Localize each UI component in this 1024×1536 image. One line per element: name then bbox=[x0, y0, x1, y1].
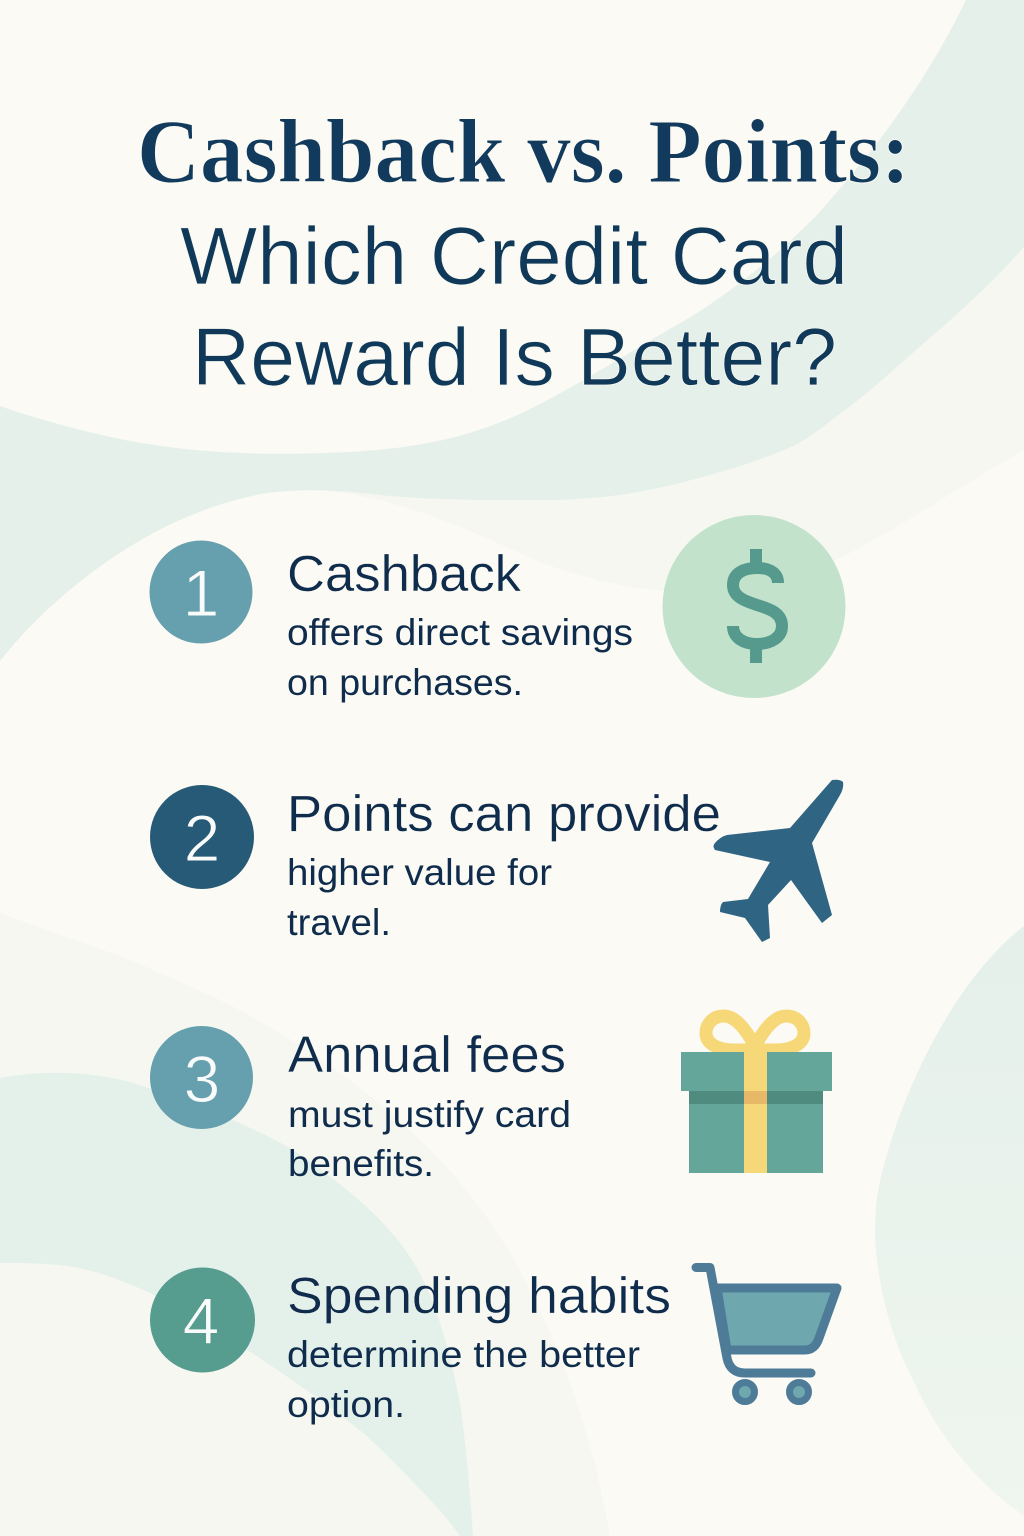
text: cashback: offers direct savings bbox=[287, 612, 633, 653]
number badge 3: 3 bbox=[184, 1042, 220, 1116]
number badge 4: 4 bbox=[183, 1284, 219, 1358]
text: cashback: Cashback bbox=[287, 545, 522, 602]
text: spending habits: determine the better bbox=[287, 1334, 640, 1375]
icon: gift box bbox=[681, 1016, 832, 1173]
text: points: higher value for bbox=[287, 852, 552, 893]
number badge 3 bbox=[150, 1026, 253, 1129]
number badge 4 bbox=[150, 1268, 255, 1372]
item 2: points bbox=[150, 780, 843, 943]
text: spending habits: option. bbox=[287, 1384, 405, 1425]
text: cashback bbox=[287, 545, 633, 703]
title: Cashback vs. Points: bbox=[137, 101, 910, 202]
title: Which Credit Card bbox=[180, 211, 848, 302]
text: spending habits bbox=[287, 1267, 671, 1425]
text: spending habits: Spending habits bbox=[287, 1267, 671, 1324]
text: points: travel. bbox=[287, 902, 391, 943]
text: annual fees: benefits. bbox=[288, 1143, 434, 1184]
item 4: spending habits bbox=[150, 1267, 837, 1425]
text: annual fees: Annual fees bbox=[288, 1026, 566, 1083]
item 3: annual fees bbox=[150, 1016, 832, 1184]
text: points: Points can provide bbox=[287, 785, 721, 842]
icon: dollar coin bbox=[662, 515, 846, 698]
title bbox=[137, 101, 910, 403]
number badge 2: 2 bbox=[184, 801, 220, 875]
text: points bbox=[287, 785, 721, 943]
number badge 1: 1 bbox=[183, 556, 219, 630]
text: annual fees bbox=[288, 1026, 571, 1184]
text: annual fees: must justify card bbox=[288, 1094, 571, 1135]
number badge 2 bbox=[150, 785, 254, 889]
text: cashback: on purchases. bbox=[287, 662, 523, 703]
icon: airplane bbox=[714, 780, 843, 942]
item 1: cashback bbox=[150, 515, 846, 703]
icon: shopping cart bbox=[696, 1268, 837, 1402]
title: Reward Is Better? bbox=[192, 312, 837, 403]
number badge 1 bbox=[150, 540, 252, 644]
